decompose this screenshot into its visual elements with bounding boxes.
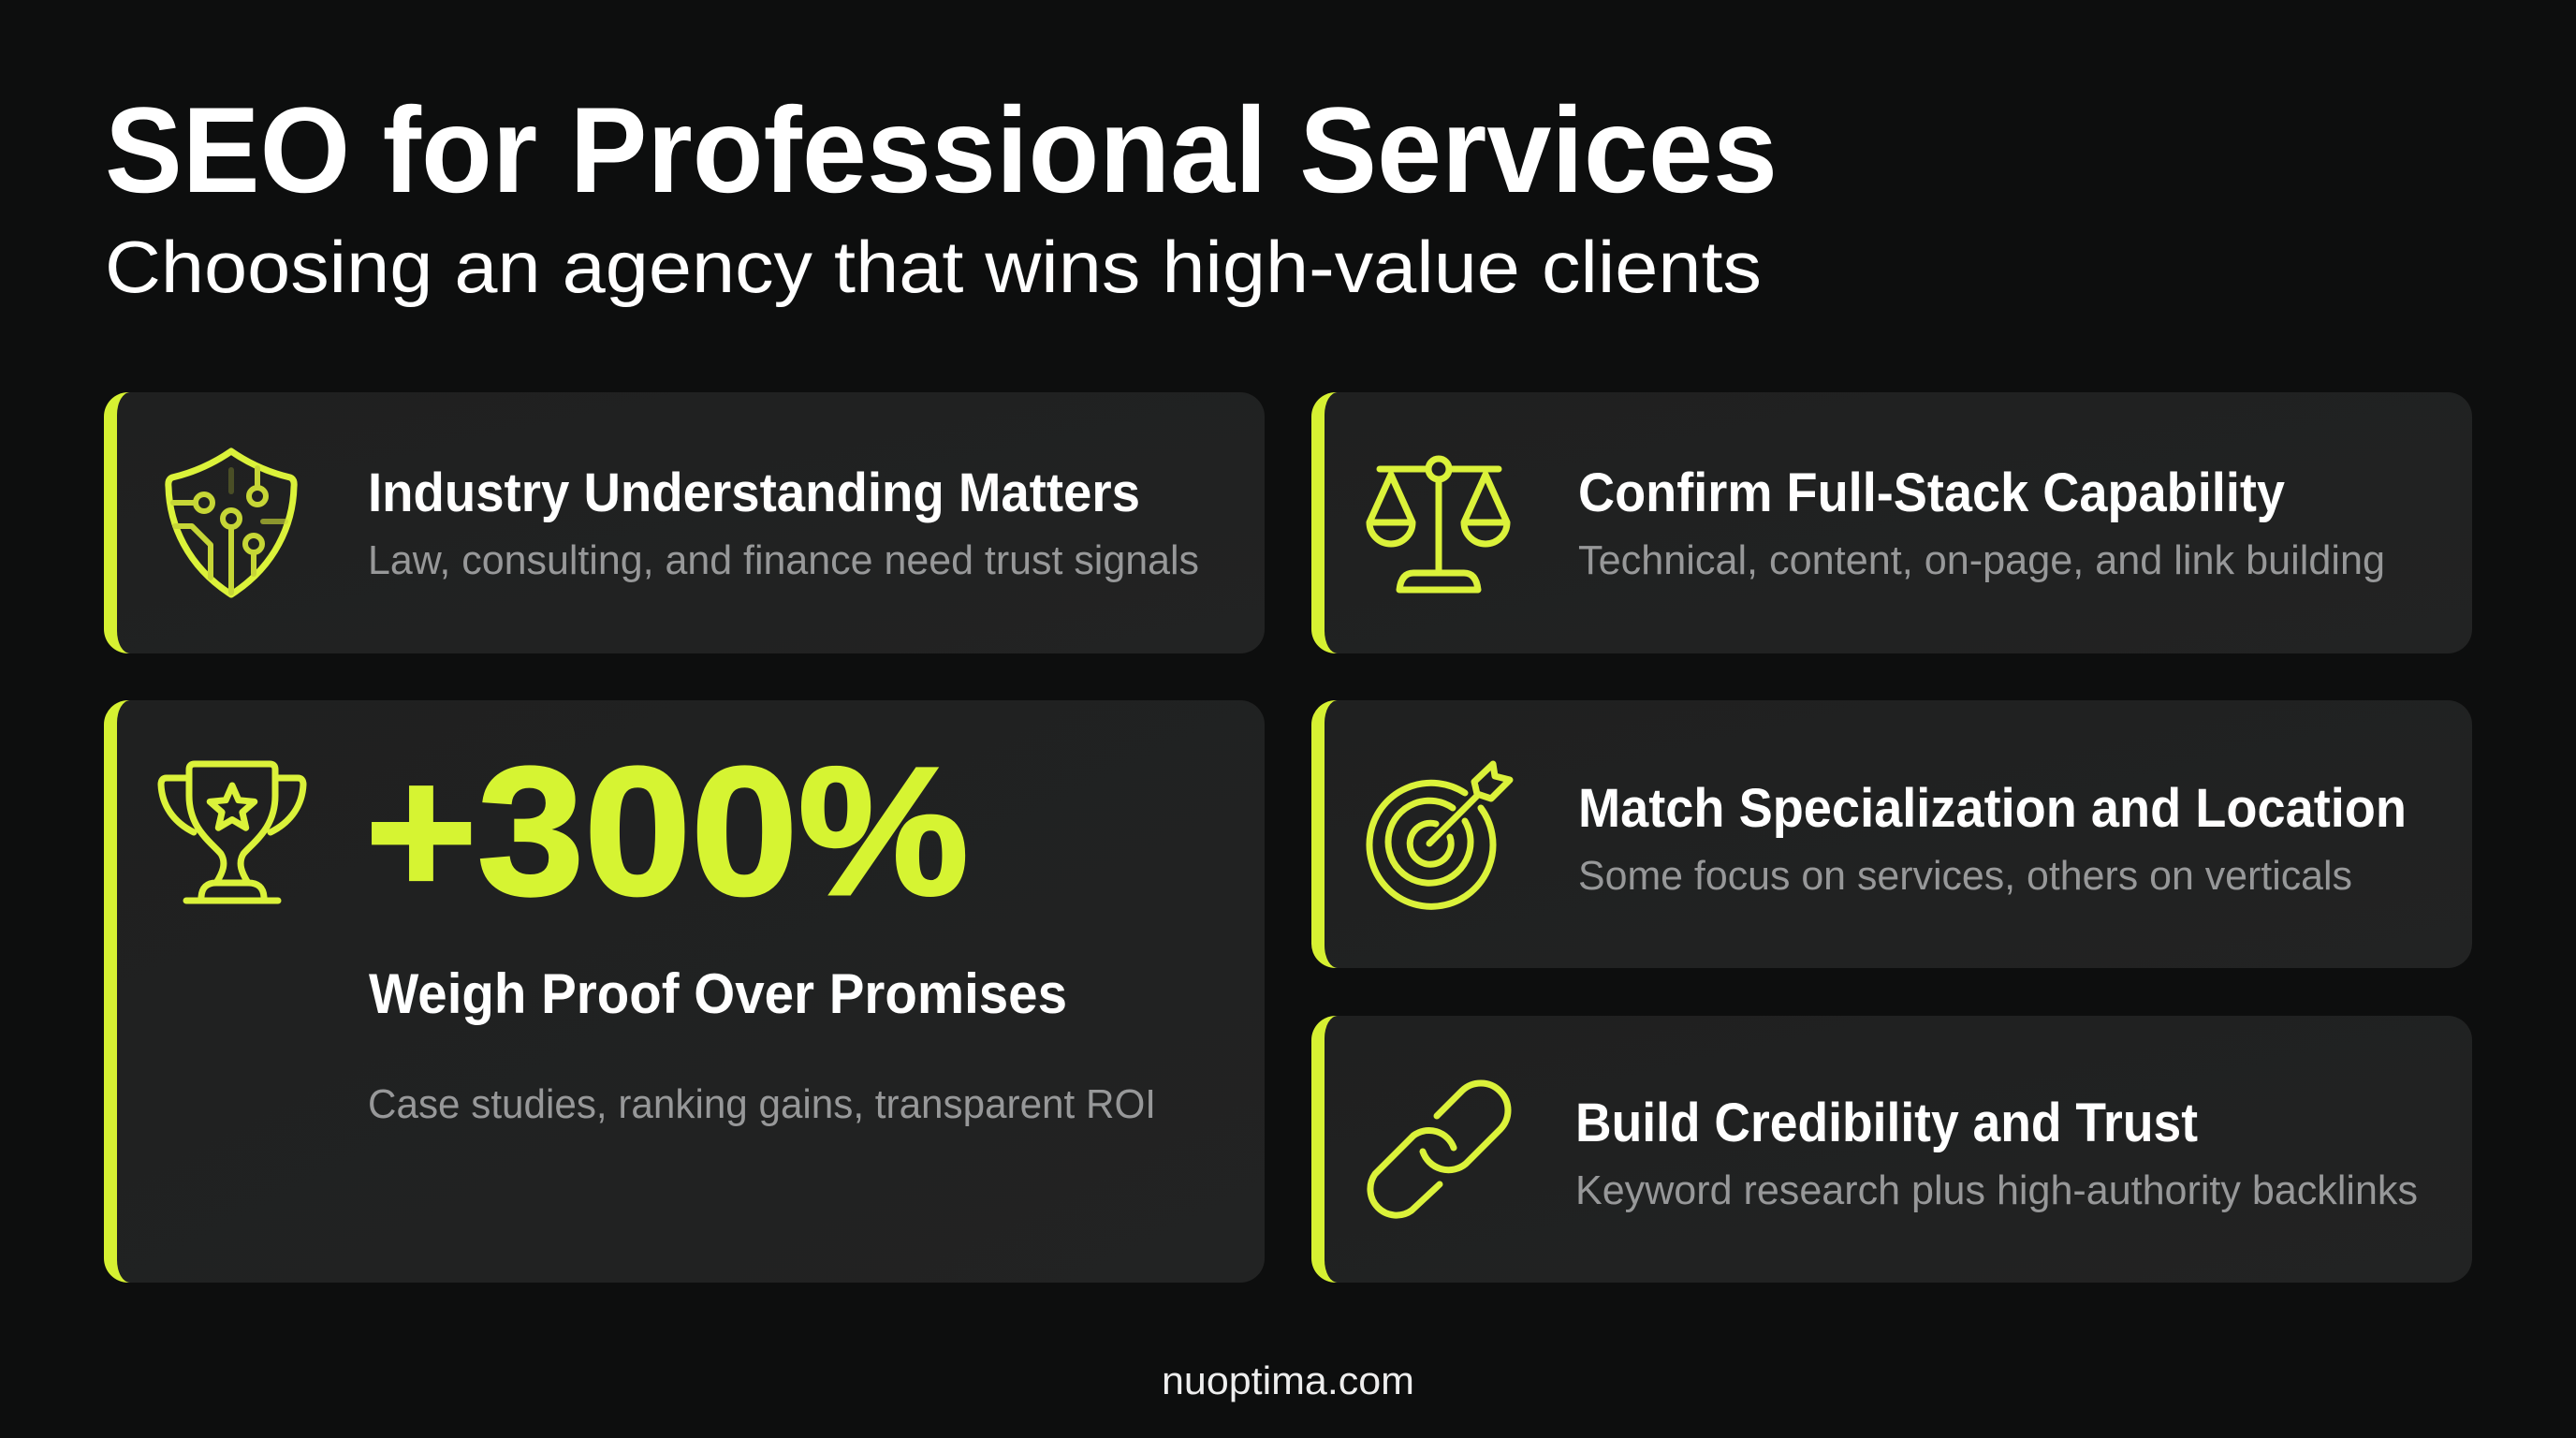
- description: Some focus on services, others on verticals: [1578, 853, 2352, 899]
- heading: Match Specialization and Location: [1578, 778, 2407, 839]
- panel: credibility and trust: [1311, 1016, 2472, 1283]
- description: Keyword research plus high-authority backlinks: [1575, 1167, 2418, 1213]
- description: Law, consulting, and finance need trust signals: [368, 537, 1199, 583]
- title: SEO for Professional Services: [105, 81, 1778, 218]
- panel: industry understanding: [104, 392, 1265, 653]
- heading: Industry Understanding Matters: [368, 462, 1140, 523]
- panel: weigh proof: [104, 700, 1265, 1283]
- description: Technical, content, on-page, and link building: [1578, 537, 2385, 583]
- heading: Build Credibility and Trust: [1575, 1093, 2198, 1153]
- subtitle: Choosing an agency that wins high-value clients: [105, 226, 1762, 308]
- panel: specialization and location: [1311, 700, 2472, 968]
- description: Case studies, ranking gains, transparent ROI: [368, 1081, 1156, 1127]
- footer: nuoptima.com: [1162, 1358, 1414, 1402]
- icon: balance scales: [1369, 459, 1507, 590]
- icon: chain link: [1370, 1083, 1508, 1215]
- panel: full-stack capability: [1311, 392, 2472, 653]
- heading: Confirm Full-Stack Capability: [1578, 462, 2285, 523]
- icon: trophy: [161, 764, 303, 901]
- icon: target with arrow: [1369, 764, 1510, 906]
- stat: +300%: [365, 729, 969, 933]
- heading: Weigh Proof Over Promises: [369, 962, 1067, 1025]
- icon: circuit shield: [168, 451, 294, 594]
